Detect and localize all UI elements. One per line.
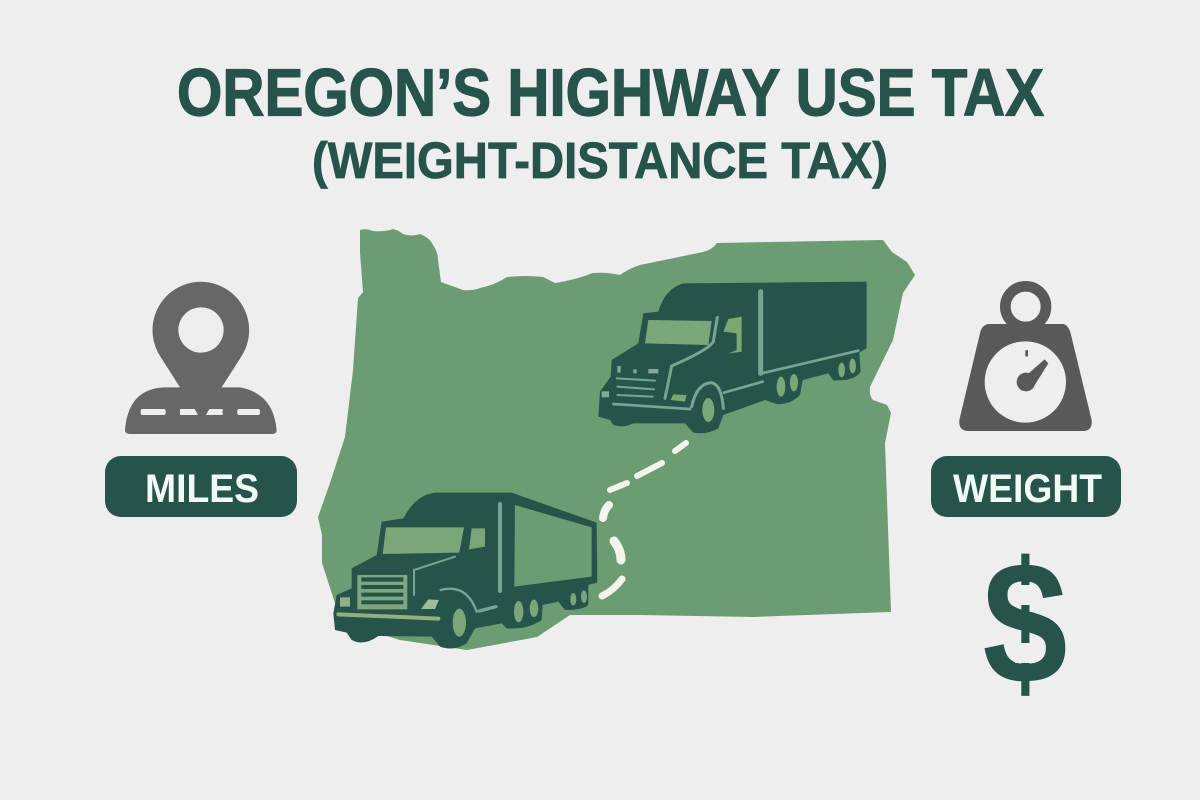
panel: Oregon map with trucks and route (318, 229, 915, 650)
subtitle: (WEIGHT-DISTANCE TAX) (312, 132, 888, 189)
icon: lower truck (333, 493, 597, 649)
Oregon state shape (318, 229, 915, 650)
label pill: weight: WEIGHT (953, 467, 1102, 511)
label pill: miles: MILES (145, 467, 259, 511)
icon: map pin on road (125, 282, 277, 434)
title: OREGON’S HIGHWAY USE TAX (177, 56, 1044, 130)
icon: upper truck (598, 282, 867, 433)
label pill: weight (931, 456, 1121, 517)
panel: miles (105, 282, 297, 517)
icon: dollar sign: $ (983, 526, 1067, 720)
label pill: miles (105, 456, 297, 517)
icon: kettlebell scale (959, 286, 1092, 431)
panel: weight (931, 286, 1121, 720)
route: dashed white path (602, 443, 686, 596)
